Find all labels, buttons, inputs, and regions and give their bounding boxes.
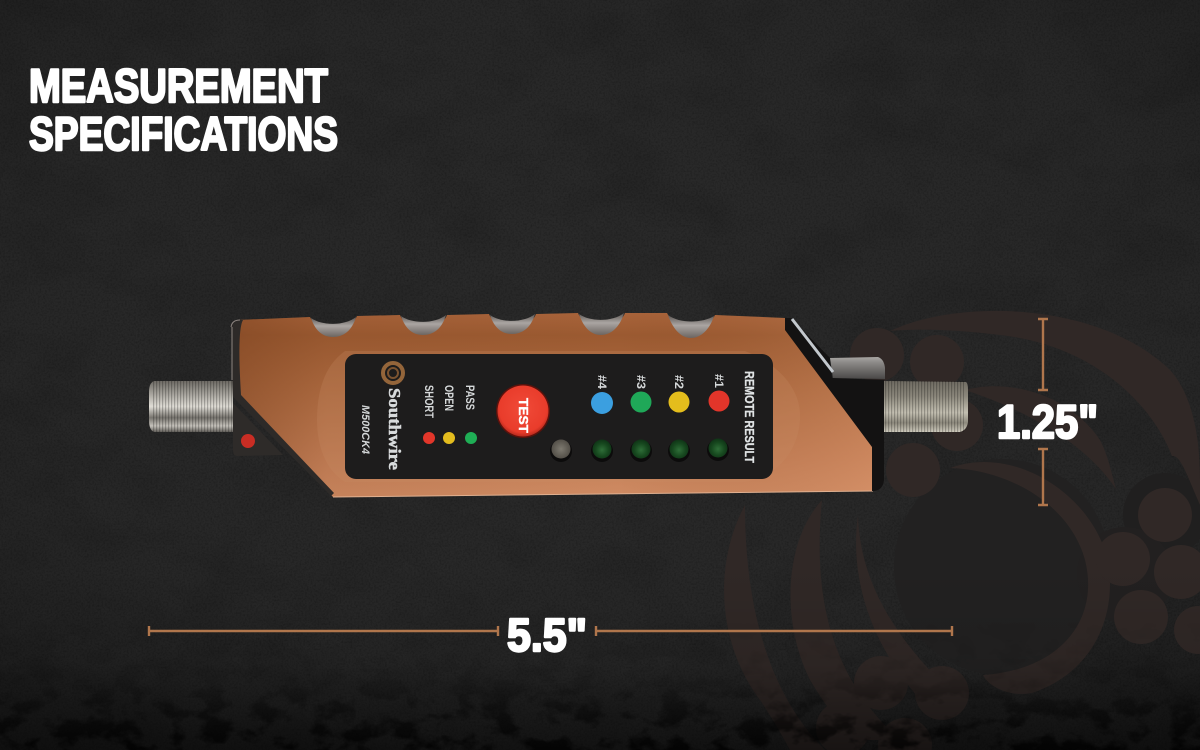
height dimension (997, 319, 1098, 505)
finger notches (311, 313, 714, 338)
left F connector (149, 381, 233, 432)
height line (1038, 319, 1048, 505)
remote numbers: #1 (712, 374, 724, 389)
status labels (422, 385, 475, 418)
height value: 1.25" (997, 395, 1098, 448)
title (29, 59, 338, 160)
width dimension (149, 609, 952, 661)
remote colour dots (591, 390, 730, 414)
right F connector (884, 381, 968, 432)
remote result label: REMOTE RESULT (742, 371, 756, 463)
model number: M500CK4 (359, 405, 371, 454)
test button (496, 384, 550, 438)
product: coax tester (149, 313, 968, 497)
status indicator dots (423, 432, 477, 444)
width value: 5.5" (507, 609, 587, 661)
brand name: Southwire (385, 388, 404, 470)
status labels: OPEN (442, 385, 454, 411)
status labels: SHORT (422, 385, 434, 418)
remote numbers: #2 (672, 375, 684, 389)
Southwire logo (383, 363, 403, 383)
result LEDs (550, 438, 729, 462)
remote numbers: #3 (634, 375, 646, 389)
copper body (238, 313, 873, 497)
status labels: PASS (463, 385, 475, 410)
width line (149, 626, 952, 636)
right black end cap (785, 318, 885, 491)
remote numbers: #4 (595, 375, 607, 390)
watermark logo (724, 311, 1200, 750)
left red indicator (241, 434, 255, 448)
left black end cap (231, 320, 334, 496)
panel surround (317, 351, 800, 482)
black control panel (345, 354, 773, 479)
test button: TEST (516, 398, 530, 433)
remote numbers (595, 374, 724, 390)
title: SPECIFICATIONS (29, 107, 338, 160)
bottom grime (0, 668, 1200, 750)
title: MEASUREMENT (29, 59, 328, 112)
